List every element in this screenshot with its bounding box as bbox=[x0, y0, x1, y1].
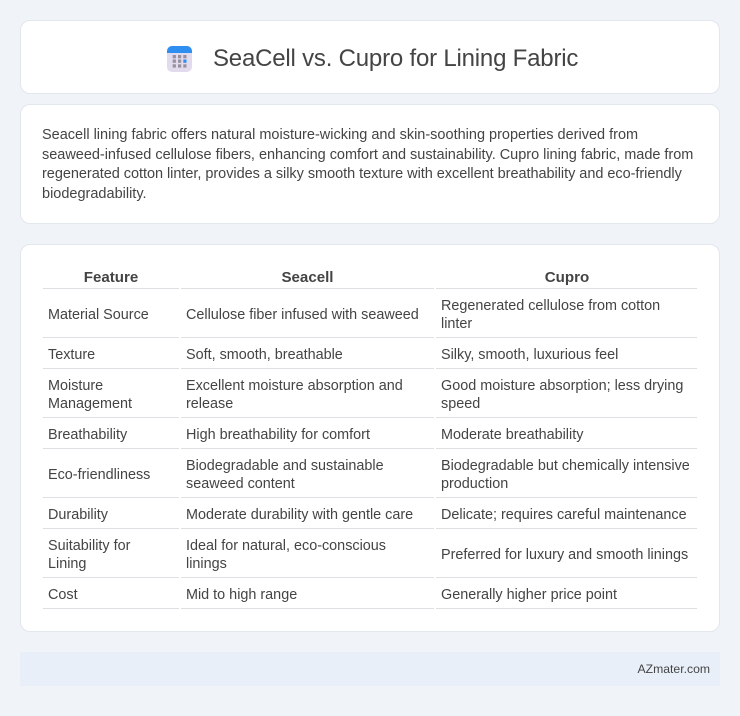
title card bbox=[20, 20, 720, 94]
row: suitability for lining bbox=[48, 538, 688, 572]
row: suitability for lining: Preferred for luxury and smooth linings bbox=[441, 547, 688, 563]
row: cost: Cost bbox=[48, 587, 78, 603]
row: durability bbox=[48, 507, 687, 523]
row: suitability for lining: Lining bbox=[48, 556, 86, 572]
row: material source: Material Source bbox=[48, 307, 149, 323]
intro text: seaweed-infused cellulose fibers, enhancing comfort and sustainability. Cupro lining fabric, made from bbox=[42, 147, 693, 163]
intro text: Seacell lining fabric offers natural moisture-wicking and skin-soothing properties derived from bbox=[42, 127, 638, 143]
row: moisture management: Good moisture absorption; less drying bbox=[441, 378, 683, 394]
row: moisture management: Excellent moisture absorption and bbox=[186, 378, 403, 394]
intro card bbox=[20, 104, 720, 224]
row: cost: Generally higher price point bbox=[441, 587, 617, 603]
table card bbox=[20, 244, 720, 632]
icon: calendar bbox=[167, 46, 192, 72]
row: breathability bbox=[48, 427, 584, 443]
row: moisture management: Management bbox=[48, 396, 132, 412]
row: breathability: High breathability for comfort bbox=[186, 427, 370, 443]
row: suitability for lining: Suitability for bbox=[48, 538, 130, 554]
table header: Cupro bbox=[545, 269, 589, 286]
row: texture: Texture bbox=[48, 347, 95, 363]
row: suitability for lining: Ideal for natural, eco-conscious bbox=[186, 538, 386, 554]
row: texture bbox=[48, 347, 618, 363]
row: durability: Delicate; requires careful maintenance bbox=[441, 507, 687, 523]
row: moisture management bbox=[48, 378, 683, 412]
table header: Seacell bbox=[281, 269, 334, 286]
table header bbox=[84, 269, 589, 286]
row: moisture management: speed bbox=[441, 396, 480, 412]
row: eco-friendliness: Biodegradable and sustainable bbox=[186, 458, 384, 474]
row: suitability for lining: linings bbox=[186, 556, 227, 572]
row: cost: Mid to high range bbox=[186, 587, 297, 603]
footer credit: AZmater.com bbox=[638, 662, 710, 676]
intro text: regenerated cotton linter, provides a silky smooth texture with excellent breathability and eco-friendly bbox=[42, 166, 682, 182]
row: eco-friendliness: Biodegradable but chemically intensive bbox=[441, 458, 690, 474]
row: eco-friendliness: production bbox=[441, 476, 508, 492]
row: durability: Moderate durability with gentle care bbox=[186, 507, 413, 523]
row: texture: Soft, smooth, breathable bbox=[186, 347, 343, 363]
intro text bbox=[42, 127, 693, 202]
title: SeaCell vs. Cupro for Lining Fabric bbox=[213, 45, 578, 72]
row: durability: Durability bbox=[48, 507, 108, 523]
table header: Feature bbox=[84, 269, 138, 286]
row: material source bbox=[48, 298, 660, 332]
intro text: biodegradability. bbox=[42, 186, 147, 202]
row: moisture management: Moisture bbox=[48, 378, 103, 394]
comparison table bbox=[43, 269, 697, 609]
row: material source: Cellulose fiber infused with seaweed bbox=[186, 307, 419, 323]
row: breathability: Breathability bbox=[48, 427, 127, 443]
row: material source: linter bbox=[441, 316, 472, 332]
row: eco-friendliness: Eco-friendliness bbox=[48, 467, 150, 483]
row: eco-friendliness bbox=[48, 458, 690, 492]
row: cost bbox=[48, 587, 617, 603]
row: eco-friendliness: seaweed content bbox=[186, 476, 295, 492]
row: material source: Regenerated cellulose from cotton bbox=[441, 298, 660, 314]
row: breathability: Moderate breathability bbox=[441, 427, 583, 443]
row: moisture management: release bbox=[186, 396, 233, 412]
row: texture: Silky, smooth, luxurious feel bbox=[441, 347, 618, 363]
footer bar bbox=[20, 652, 720, 686]
